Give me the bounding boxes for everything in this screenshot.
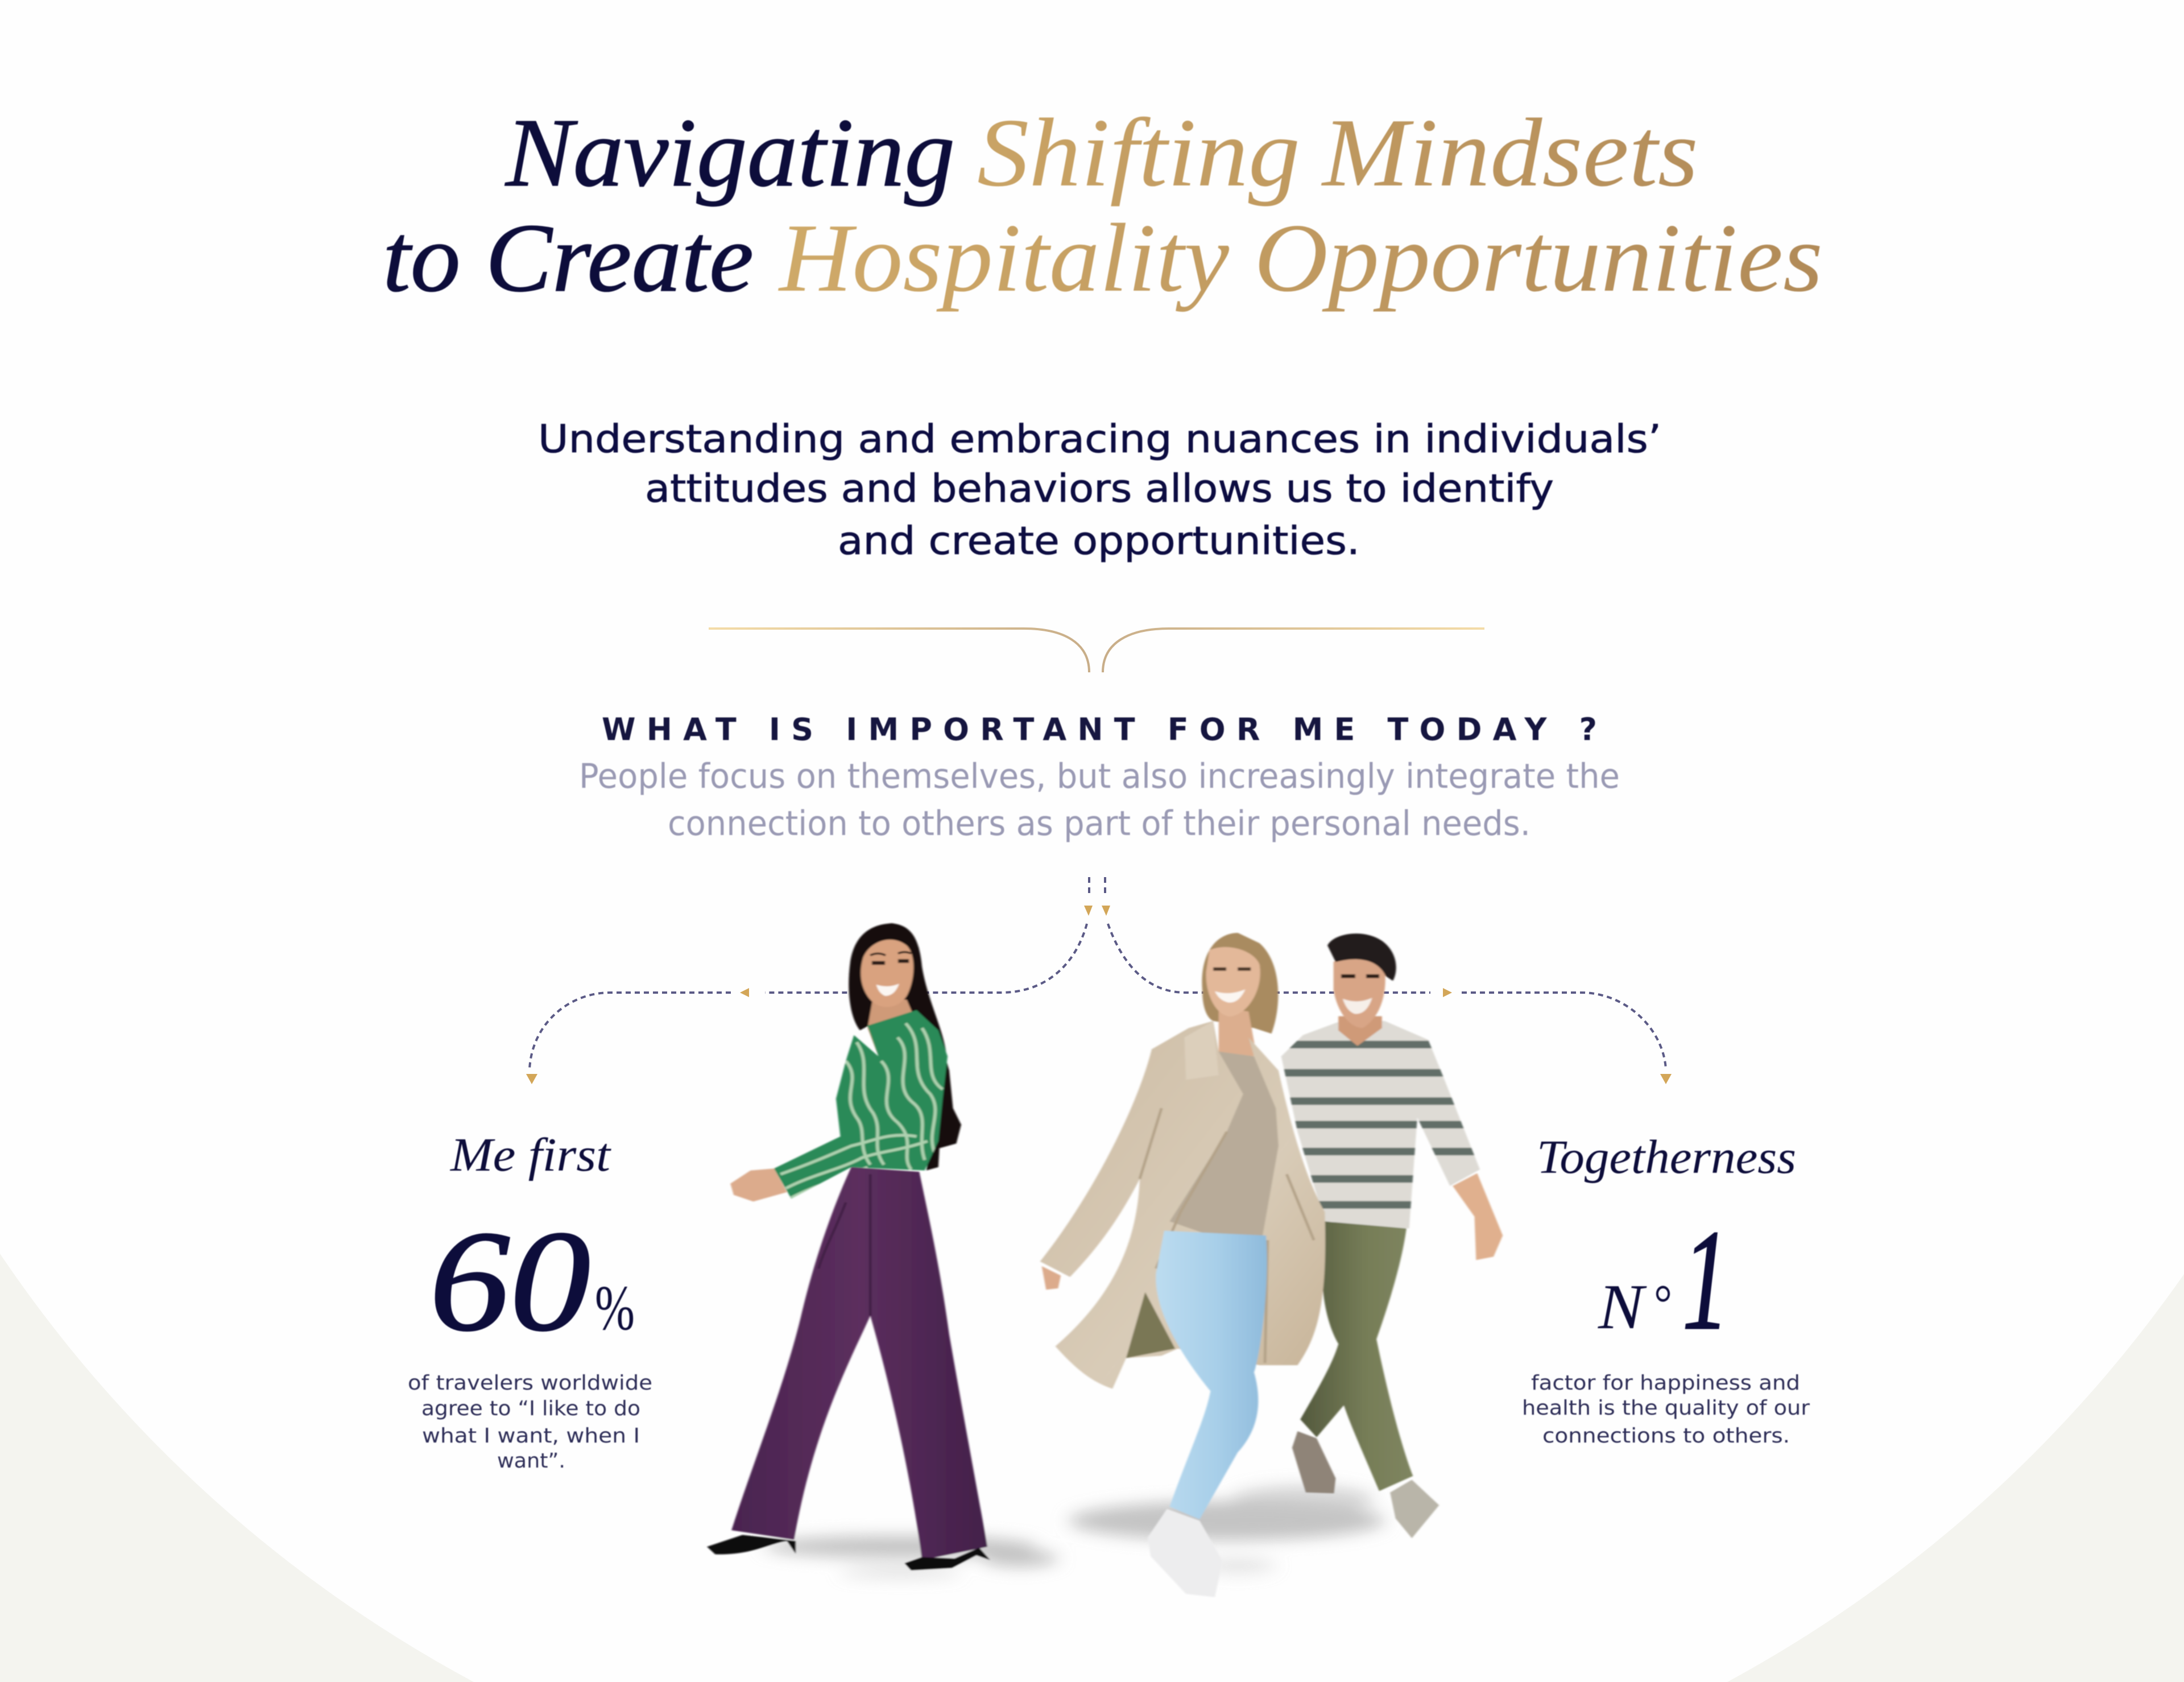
blouse (774, 1010, 948, 1199)
title: to Create (383, 204, 754, 312)
striped sweater (1276, 1021, 1480, 1229)
stat column: togetherness (1522, 1131, 1810, 1448)
arrowheads (526, 906, 1672, 1084)
section description: People focus on themselves, but also increasingly integrate the (579, 757, 1620, 796)
sneakers (1148, 1509, 1222, 1597)
divider bracket (709, 629, 1484, 672)
heading: me first: Me first (450, 1129, 612, 1181)
heading: togetherness: Togetherness (1537, 1131, 1796, 1184)
hair (849, 923, 961, 1171)
description: togetherness: factor for happiness and (1531, 1371, 1800, 1395)
eyes and smile (1341, 976, 1379, 1014)
intro text (538, 417, 1661, 564)
title: Opportunities (1254, 204, 1823, 312)
description: me first (408, 1371, 652, 1473)
intro text: attitudes and behaviors allows us to identify (645, 466, 1554, 511)
trouser pleats (818, 1174, 870, 1316)
section description (579, 757, 1620, 844)
description: me first: what I want, when I (422, 1424, 640, 1448)
description: togetherness: connections to others. (1542, 1424, 1790, 1448)
coat collar (1184, 1021, 1219, 1080)
number: 60 percent: 60 (429, 1201, 590, 1361)
hand (1042, 1266, 1061, 1290)
shoes (1292, 1431, 1439, 1538)
number: no. 1: ° (1654, 1274, 1672, 1332)
eyes and smile (1213, 969, 1251, 1003)
smile and eyes (870, 952, 911, 996)
face (1206, 947, 1260, 1016)
floor shadows (764, 1485, 1385, 1577)
title: Mindsets (1321, 99, 1698, 207)
coat folds (1140, 1108, 1314, 1363)
sweater (1170, 1052, 1279, 1241)
person: woman in trench coat (1040, 933, 1325, 1597)
heels (707, 1535, 990, 1571)
trousers (731, 1167, 987, 1560)
description: me first: of travelers worldwide (408, 1371, 652, 1395)
face (1334, 955, 1385, 1028)
person: woman in green blouse (707, 923, 990, 1571)
number: no. 1: 1 (1682, 1200, 1729, 1359)
people photo group (707, 923, 1503, 1597)
intro text: Understanding and embracing nuances in individuals’ (538, 417, 1661, 462)
title: Shifting (977, 99, 1300, 207)
person: man in striped sweater (1276, 933, 1503, 1538)
face (861, 940, 913, 1007)
title: Hospitality (778, 204, 1230, 312)
jeans (1156, 1231, 1267, 1519)
section heading: WHAT IS IMPORTANT FOR ME TODAY ? (602, 712, 1597, 747)
description: me first: agree to “I like to do (421, 1397, 640, 1420)
number: no. 1 (1598, 1200, 1729, 1359)
dashed split arrows (526, 877, 1672, 1084)
hair (1327, 933, 1396, 981)
section description: connection to others as part of their personal needs. (668, 804, 1531, 844)
coat lining (1126, 1292, 1175, 1358)
hair (1202, 933, 1278, 1034)
title: Navigating (504, 99, 955, 207)
intro text: and create opportunities. (838, 519, 1360, 564)
trousers (1300, 1221, 1413, 1491)
number: 60 percent: % (595, 1273, 635, 1344)
neck (1219, 1007, 1257, 1056)
number: no. 1: N (1598, 1272, 1647, 1342)
description: togetherness: health is the quality of our (1522, 1396, 1810, 1420)
description: me first: want”. (497, 1449, 565, 1473)
trench coat (1040, 1021, 1325, 1388)
neck (1338, 1016, 1382, 1046)
title (383, 99, 1823, 312)
hand (730, 1168, 787, 1201)
description: togetherness (1522, 1371, 1810, 1448)
forearm and hand (1453, 1173, 1503, 1260)
neck (867, 997, 914, 1056)
stat column: me first (408, 1129, 652, 1473)
